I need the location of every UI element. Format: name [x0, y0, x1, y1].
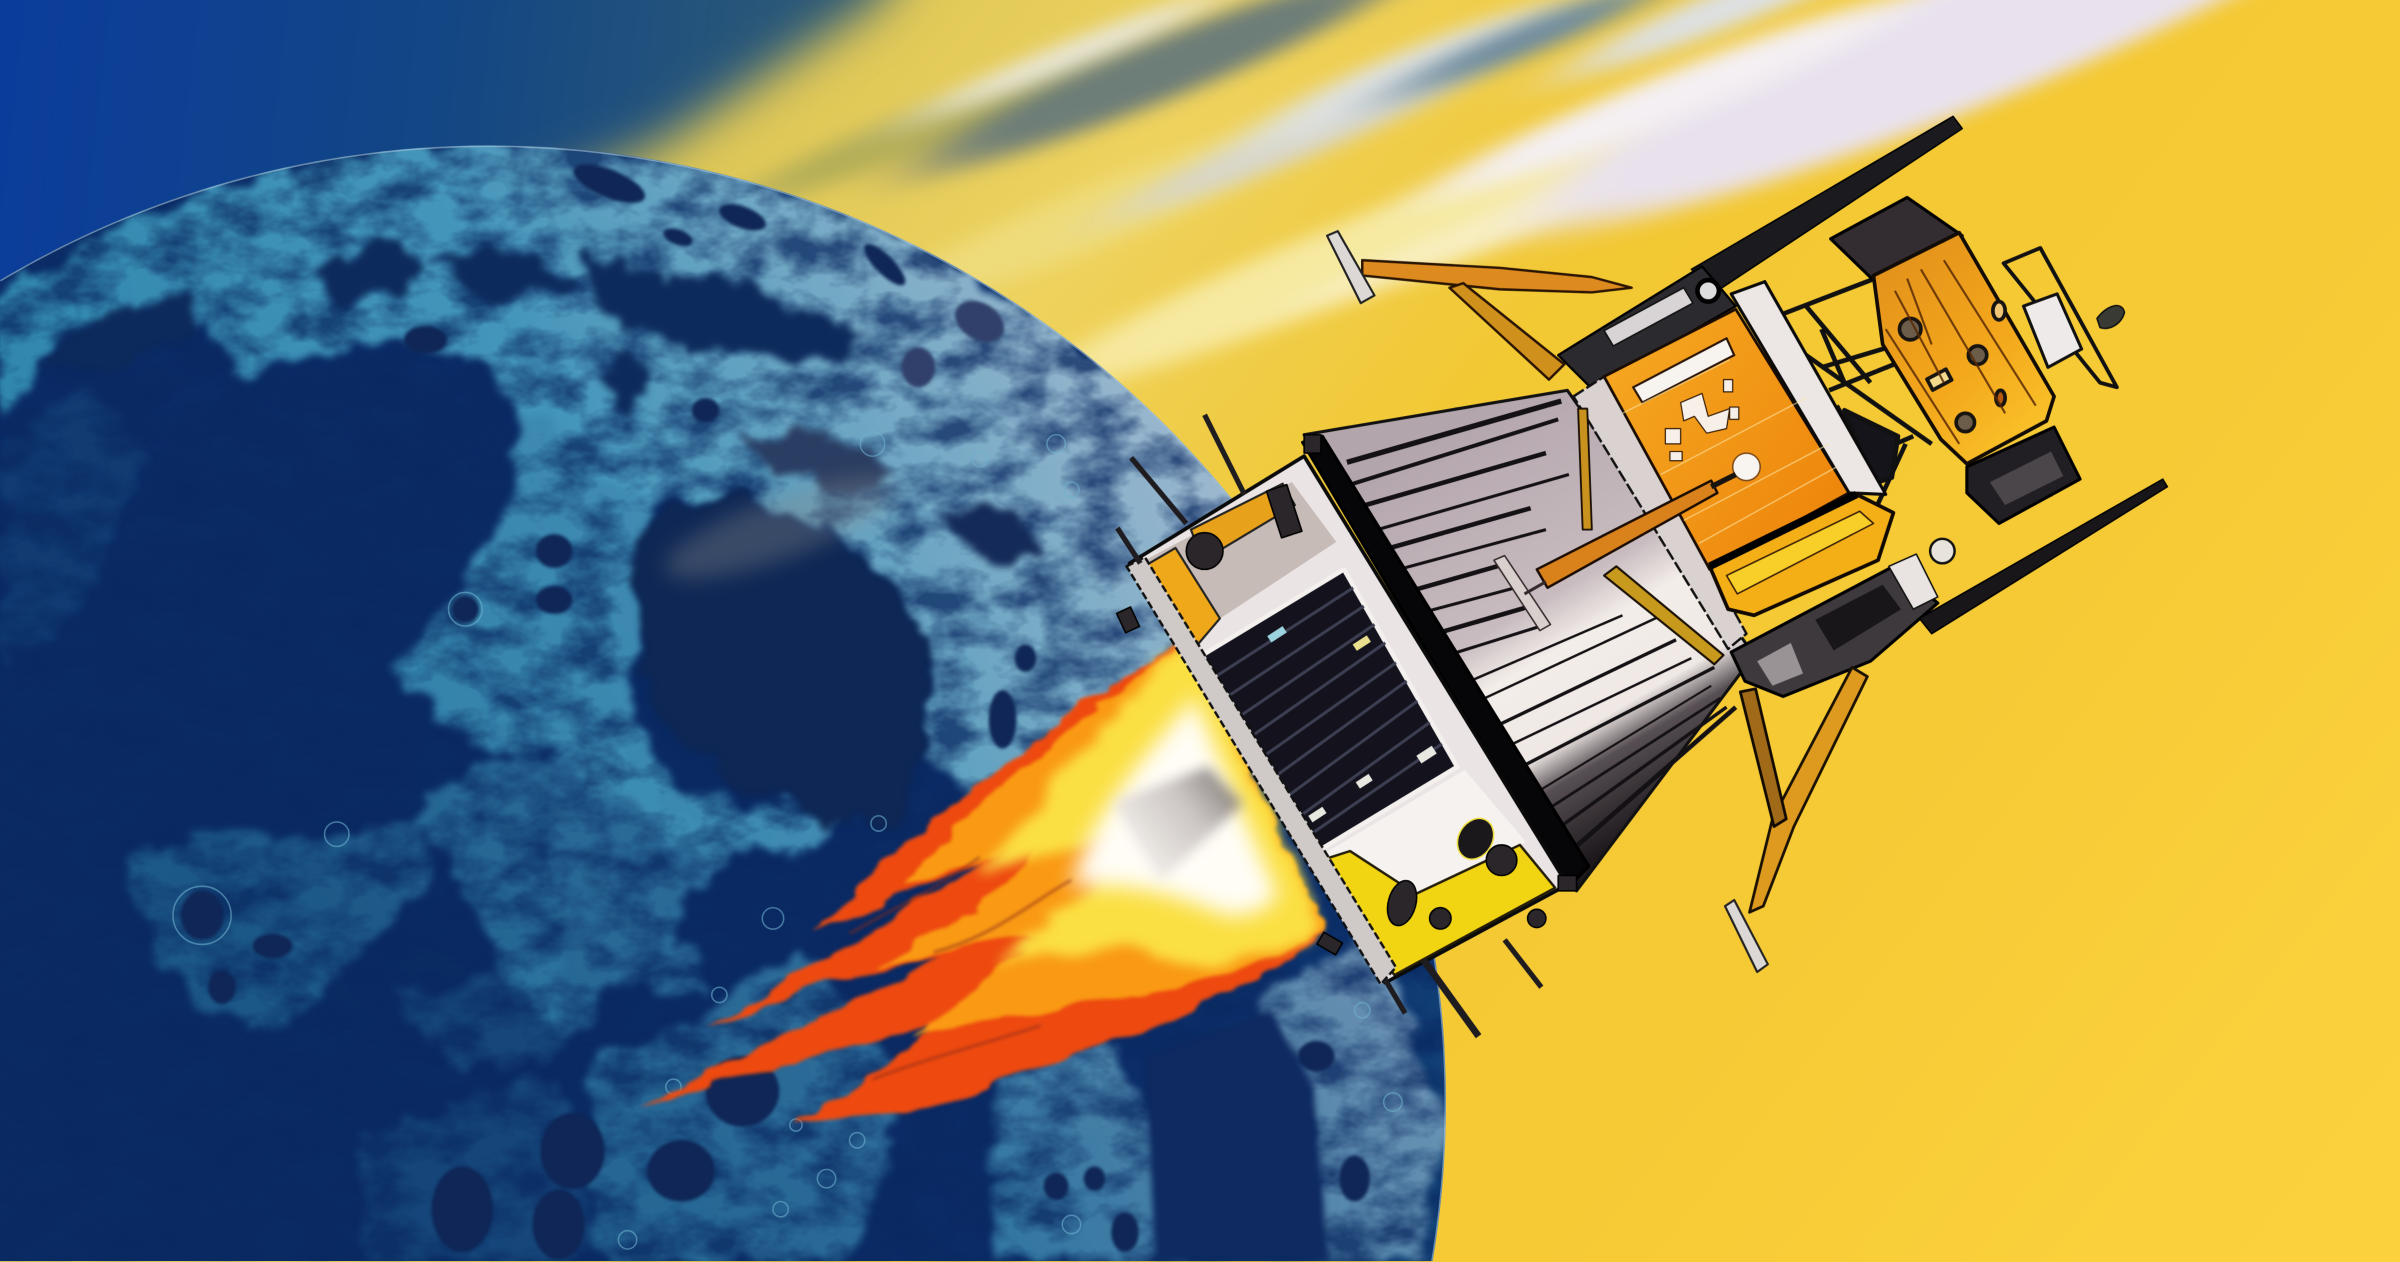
- top module ports: [1899, 302, 2005, 432]
- top module: [1831, 197, 2080, 523]
- moon rim light: [0, 145, 1446, 1261]
- right side frame: [2004, 248, 2124, 387]
- dark maria: [43, 237, 1041, 827]
- small ring craters: [173, 432, 1402, 1249]
- flame orange: [872, 643, 1326, 1038]
- engine nozzle: [1113, 767, 1243, 882]
- orange fuel tank: [1710, 494, 1893, 615]
- support rod with ball: [1537, 453, 1760, 588]
- flame white core: [1071, 696, 1278, 916]
- blue upper left sky: [0, 0, 980, 459]
- lower landing leg: [1725, 667, 1867, 972]
- cone: [1304, 390, 1754, 891]
- top module dark base: [1967, 427, 2080, 523]
- cone hatching: [1347, 401, 1736, 854]
- T bracket: [1494, 556, 1551, 631]
- module silver face: [1130, 456, 1567, 983]
- moon: [0, 141, 1454, 1261]
- panel switches: [1665, 380, 1739, 461]
- dust haze over mare: [660, 471, 896, 586]
- solar panel: [1192, 569, 1457, 851]
- lower equipment block: [1731, 539, 1955, 696]
- module thrusters: [1117, 435, 1577, 955]
- exhaust flame: [638, 640, 1326, 1122]
- surface mottling: [0, 141, 1454, 1261]
- gold rods on cone: [1578, 409, 1723, 664]
- module yellow corner upper: [1139, 548, 1220, 649]
- module hatch grey: [1145, 482, 1336, 634]
- hatched strip: [1573, 377, 1746, 649]
- panel white strip: [1731, 282, 1886, 494]
- top module dark cap: [1831, 197, 1962, 285]
- antennas: [1117, 415, 1541, 1036]
- central black band: [1303, 436, 1589, 888]
- orange control panel: [1604, 282, 1886, 569]
- module base ribs: [1127, 557, 1396, 984]
- flame yellow: [987, 646, 1326, 966]
- panel hatching: [1622, 360, 1837, 543]
- panel white bar: [1633, 338, 1734, 403]
- top module orange body: [1873, 233, 2054, 464]
- dark basin lower right: [1145, 1010, 1329, 1261]
- struts between modules: [1783, 276, 1932, 543]
- lunar lander: [1113, 116, 2167, 1036]
- module yellow corner lower: [1312, 845, 1555, 975]
- light highlands: [0, 141, 1446, 1261]
- craters: [181, 157, 1370, 1260]
- sky streaks: [724, 0, 2400, 553]
- module white lower face: [1318, 770, 1526, 912]
- upper boom arm: [1558, 116, 1962, 389]
- moon disc: [0, 145, 1446, 1261]
- lower right boom: [1919, 479, 2167, 634]
- upper landing leg: [1327, 231, 1632, 380]
- flame dark licks: [849, 857, 1071, 1079]
- flame outer red: [638, 640, 1324, 1122]
- descent module: [1117, 435, 1577, 984]
